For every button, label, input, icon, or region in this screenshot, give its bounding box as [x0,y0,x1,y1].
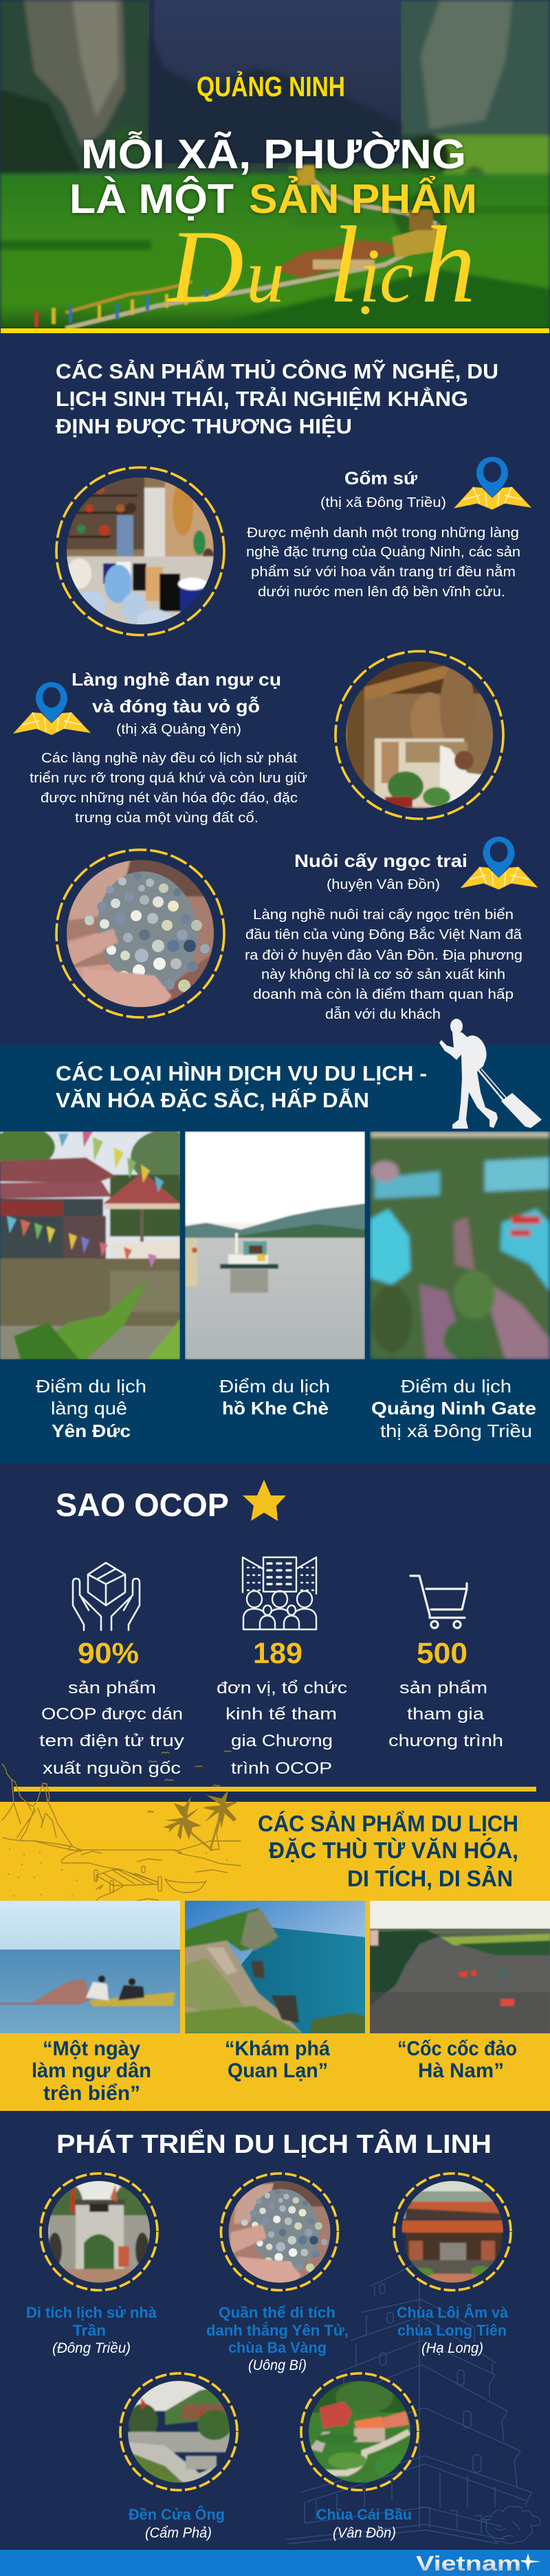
label: Chùa Lôi Âm và chùa Long Tiên [397,2304,509,2356]
label: Quần thể di tích Yên Tử: chùa Ba Vàng [228,2339,327,2356]
heading: special tourism products: DI TÍCH, DI SẢN [347,1866,513,1891]
text block: Nuôi cấy ngọc trai: đầu tiên của vùng Đông Bắc Việt Nam đã [245,927,522,942]
text block: Nuôi cấy ngọc trai: (huyện Vân Đồn) [327,877,440,892]
stat: 189: đơn vị, tổ chức [217,1679,347,1697]
label: Di tích lịch sử nhà Trần: Di tích lịch sử nhà [26,2304,157,2321]
caption: Khám phá Quan Lạn: “Khám phá [225,2037,330,2060]
heading: handicraft section: LỊCH SINH THÁI, TRẢI NGHIỆM KHẲNG [56,386,468,411]
text block: Gốm sứ: phẩm sứ với hoa văn trang trí đều nằm [251,564,516,580]
caption: Cốc cốc đảo Hà Nam: Hà Nam” [418,2059,504,2082]
heading: spiritual tourism: PHÁT TRIỂN DU LỊCH TÂM LINH [56,2128,492,2159]
caption: Quảng Ninh Gate: Điểm du lịch [401,1376,512,1397]
caption: Yên Đức: Điểm du lịch [36,1376,146,1397]
caption: Khám phá Quan Lạn: Quan Lạn” [228,2059,328,2082]
stat: 90%: 90% [78,1637,139,1670]
photo circle: Yên Tử complex [221,2173,338,2290]
text block: Nuôi cấy ngọc trai: dẫn với du khách [325,1006,441,1022]
translucent navy title panel [149,0,401,163]
text block: Gốm sứ: nghề đặc trưng của Quảng Ninh, các sản [246,545,520,560]
label: Quần thể di tích Yên Tử [206,2304,349,2373]
icon: map pin Gốm sứ [454,457,531,510]
text block: Làng nghề đan ngư cụ: Làng nghề đan ngư cụ [72,669,281,690]
text block: Nuôi cấy ngọc trai: ra đời ở huyện đảo Vân Đồn. Địa phương [245,948,522,963]
stat: 90%: xuất nguồn gốc [43,1759,181,1778]
text block: Làng nghề đan ngư cụ: trưng của một vùng đất cổ. [75,811,258,826]
label: Quần thể di tích Yên Tử: (Uông Bí) [248,2358,307,2373]
hero photo: limestone cliffs and rice fields with a festival procession [0,0,550,328]
caption: Cốc cốc đảo Hà Nam: “Cốc cốc đảo [397,2037,517,2060]
caption: Yên Đức [36,1376,146,1441]
label: Đền Cửa Ông [129,2506,225,2541]
title: Quảng Ninh: QUẢNG NINH [197,71,345,102]
logo: Vietnam+: Vietnam [416,2551,521,2575]
heading: handicraft section: CÁC SẢN PHẨM THỦ CÔNG MỸ NGHỆ, DU [56,359,498,383]
caption: Cốc cốc đảo Hà Nam [397,2037,517,2082]
illustration: beach sketch with mountains, palms, dock and boat [2,1751,241,1904]
photo: Yên Đức village [0,1131,180,1359]
text block: Làng nghề đan ngư cụ: Các làng nghề này đều có lịch sử phát [41,751,297,766]
stat: 90%: tem điện tử truy [39,1732,184,1750]
text block: Làng nghề đan ngư cụ: (thị xã Quảng Yên) [116,722,241,737]
label: Chùa Lôi Âm và chùa Long Tiên: (Hạ Long) [421,2340,483,2356]
caption: Yên Đức: làng quê [51,1398,127,1419]
icon: hands holding box [73,1563,140,1630]
label: Chùa Cái Bầu: Chùa Cái Bầu [316,2506,412,2523]
title: main headline [69,131,477,222]
icon: star [243,1480,286,1521]
label: Quần thể di tích Yên Tử: danh thắng Yên Tử, [206,2322,349,2339]
heading: tourism services: CÁC LOẠI HÌNH DỊCH VỤ DU LỊCH - [56,1061,427,1085]
panel: ceramics photo circle [56,467,224,635]
text block: Gốm sứ: Được mệnh danh một trong những làng [247,526,519,541]
caption: Quảng Ninh Gate: Quảng Ninh Gate [371,1398,536,1419]
stat: 189: gia Chương [231,1732,333,1750]
caption: hồ Khe Chè: Điểm du lịch [219,1376,330,1397]
photo: fisherman on boat [0,1901,180,2033]
illustration: faint pagoda outline [285,2261,540,2544]
text block: Nuôi cấy ngọc trai: Nuôi cấy ngọc trai [294,850,468,871]
photo circle: Trần dynasty relic [41,2173,157,2290]
heading: tourism services: VĂN HÓA ĐẶC SẮC, HẤP DẪN [56,1087,369,1112]
yellow divider under hero [1,328,549,333]
icon: traveler silhouette with suitcase [439,1019,542,1129]
logo: Vietnam+ [416,2551,541,2575]
label: Chùa Cái Bầu: (Vân Đồn) [333,2525,396,2541]
label: Di tích lịch sử nhà Trần [26,2304,157,2356]
stat: 189: trình OCOP [231,1759,332,1778]
text block: Gốm sứ [246,468,520,600]
label: Quần thể di tích Yên Tử: Quần thể di tích [219,2304,336,2321]
icon: buildings and people [243,1557,316,1629]
stat: 500 [388,1637,503,1750]
caption: Khám phá Quan Lạn [225,2037,330,2082]
stat: 189: kinh tế tham [226,1705,337,1724]
text block: Làng nghề đan ngư cụ: và đóng tàu vỏ gỗ [92,696,260,716]
title: main headline: MỖI XÃ, PHƯỜNG [81,131,466,177]
caption: hồ Khe Chè: hồ Khe Chè [222,1398,329,1419]
caption: Một ngày làm ngư dân trên biển [32,2037,151,2105]
photo: Hà Nam river [370,1901,550,2033]
stat: 90%: OCOP được dán [41,1705,183,1724]
heading: tourism services [56,1061,427,1112]
yellow divider above band [14,1787,536,1792]
title: script Du lịch: ị [359,234,380,319]
photo: Khe Chè lake [185,1131,365,1359]
text block: Làng nghề đan ngư cụ: được những nét văn hóa độc đáo, đặc [41,791,298,806]
label: Chùa Lôi Âm và chùa Long Tiên: chùa Long Tiên [397,2322,507,2339]
title: script Du lịch: c [380,234,414,319]
text block: Làng nghề đan ngư cụ: triển rực rỡ trong quá khứ và còn lưu giữ [30,771,307,786]
footer bar [0,2550,550,2576]
heading: Sao OCOP: SAO OCOP [56,1487,229,1523]
title: main headline: LÀ MỘT [69,176,234,222]
icon: map pin ngọc trai [461,837,538,890]
caption: Quảng Ninh Gate: thị xã Đông Triều [380,1421,532,1441]
caption: Một ngày làm ngư dân trên biển: “Một ngày [43,2037,140,2060]
icon: map pin làng nghề [13,682,91,735]
label: Di tích lịch sử nhà Trần: Trần [73,2322,106,2339]
panel: pearl photo circle [56,850,224,1017]
caption: Một ngày làm ngư dân trên biển: làm ngư dân [32,2059,151,2082]
photo circle: Cái Bầu pagoda [301,2373,418,2490]
text block: Gốm sứ: dưới nước men lên độ bền vĩnh cửu. [258,585,505,600]
stat: 189 [217,1637,347,1778]
stat: 500: sản phẩm [399,1679,487,1697]
label: Chùa Cái Bầu [316,2506,412,2541]
stat: 90% [39,1637,184,1778]
label: Đền Cửa Ông: (Cẩm Phả) [145,2525,212,2541]
stat: 500: tham gia [407,1705,485,1724]
panel: fishing gear village photo circle [336,651,503,819]
caption: Yên Đức: Yên Đức [52,1421,131,1441]
text block: Nuôi cấy ngọc trai [245,850,522,1022]
photo: Quảng Ninh Gate aerial [370,1131,550,1360]
heading: special tourism products: CÁC SẢN PHẨM DU LỊCH [258,1811,518,1836]
panel: yellow special products band [0,1802,550,2111]
text block: Gốm sứ: Gốm sứ [344,468,417,488]
title: script Du lịch: h [421,203,476,326]
text block: Nuôi cấy ngọc trai: này không chỉ là cơ sở sản xuất kinh [261,967,505,982]
text block: Làng nghề đan ngư cụ [30,669,307,826]
text block: Nuôi cấy ngọc trai: Làng nghề nuôi trai cấy ngọc trên biển [253,907,514,923]
photo circle: Cửa Ông temple [120,2373,237,2490]
text block: Nuôi cấy ngọc trai: doanh mà còn là điểm tham quan hấp [253,987,514,1002]
stat: 500: chương trình [388,1732,503,1750]
caption: Một ngày làm ngư dân trên biển: trên biển” [43,2082,140,2105]
icon: shopping cart [410,1576,467,1628]
heading: special tourism products [258,1811,518,1891]
panel: tourism services band [0,1046,550,1464]
text block: Gốm sứ: (thị xã Đông Triều) [320,495,446,510]
label: Chùa Lôi Âm và chùa Long Tiên: Chùa Lôi Âm và [397,2304,509,2321]
photo circle: Lôi Âm pagoda [394,2173,511,2290]
caption: hồ Khe Chè [219,1376,330,1419]
caption: Quảng Ninh Gate [371,1376,536,1441]
heading: handicraft section: ĐỊNH ĐƯỢC THƯƠNG HIỆU [56,414,352,438]
title: script Du lịch: D [167,209,244,324]
stat: 500: 500 [417,1637,468,1670]
stat: 189: 189 [253,1637,302,1670]
title: script Du lịch: l [329,203,359,326]
heading: handicraft section [56,359,498,438]
title: script Du lịch: u [246,234,285,319]
label: Đền Cửa Ông: Đền Cửa Ông [129,2506,225,2523]
label: Di tích lịch sử nhà Trần: (Đông Triều) [52,2340,131,2356]
title: main headline: SẢN PHẨM [249,176,477,222]
photo: Quan Lạn cliffs [185,1901,365,2033]
stat: 90%: sản phẩm [68,1679,156,1697]
heading: special tourism products: ĐẶC THÙ TỪ VĂN HÓA, [269,1838,518,1863]
